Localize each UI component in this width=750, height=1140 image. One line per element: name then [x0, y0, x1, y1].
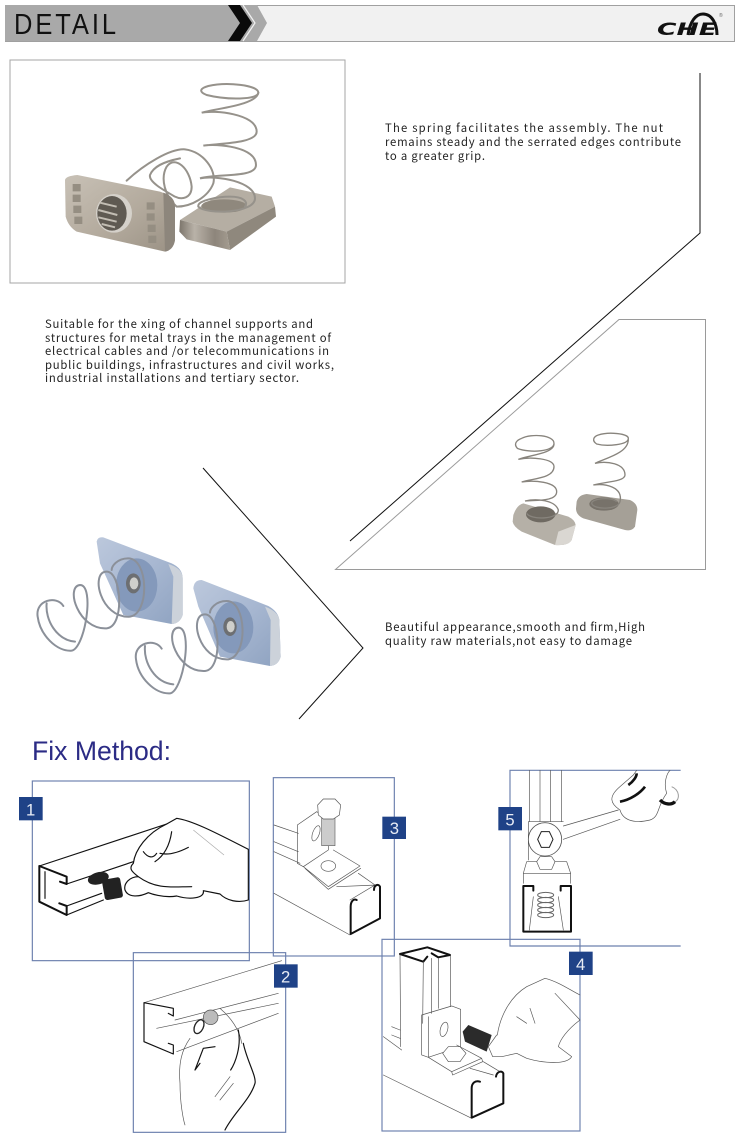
image: zinc spring nuts [37, 537, 281, 693]
step 5 [498, 770, 681, 946]
diagram: steps 4 and 5 [382, 770, 681, 1131]
step 1: 1 [26, 800, 35, 819]
step 4 [382, 939, 593, 1131]
diagram: steps 1, 2 and 3 [19, 778, 406, 1132]
divider line: upper right [350, 73, 700, 541]
panel: photo frame with steel spring nut [10, 60, 345, 283]
image: left spring nut [513, 436, 576, 545]
text block: appearance: quality raw materials,not easy to damage [385, 633, 632, 649]
logo: CHE: ® [719, 12, 723, 19]
text block: suitable uses: structures for metal trays in the management of [45, 330, 332, 346]
image: right zinc nut [136, 580, 281, 693]
text block: spring description: The spring facilitates the assembly. The nut [385, 120, 664, 136]
icon: black chevron [228, 5, 252, 41]
step 4: 4 [576, 955, 585, 974]
step 5: 5 [505, 810, 515, 829]
panel: angled frame with steel nuts [336, 320, 706, 570]
text block: spring description: to a greater grip. [385, 148, 485, 164]
step 3 [273, 778, 406, 956]
text block: spring description: remains steady and the serrated edges contribute [385, 134, 681, 150]
step 2: 2 [281, 968, 290, 987]
image: spring [127, 84, 258, 212]
logo: CHE [657, 12, 723, 40]
text block: appearance: Beautiful appearance,smooth and firm,High [385, 619, 645, 635]
step 1 [19, 781, 249, 961]
image: front nut [65, 175, 175, 252]
icon: pale chevron edge [243, 5, 255, 41]
image: left zinc nut [37, 537, 183, 651]
text block: suitable uses: public buildings, infrastructures and civil works, [45, 357, 334, 373]
heading: Fix Method: Fix Method: [32, 736, 171, 766]
text block: suitable uses: Suitable for the xing of channel supports and [45, 316, 313, 332]
step 2 [133, 953, 298, 1132]
image: right spring nut [576, 433, 637, 530]
heading: DETAIL: DETAIL [14, 7, 116, 40]
text block: suitable uses: industrial installations and tertiary sector. [45, 370, 299, 386]
text block: suitable uses: electrical cables and /or telecommunications in [45, 343, 329, 359]
logo: CHE: CHE [657, 20, 718, 40]
image: rear nut [179, 187, 276, 250]
header banner [5, 5, 734, 42]
divider line: lower left [203, 468, 363, 719]
step 3: 3 [390, 819, 399, 838]
